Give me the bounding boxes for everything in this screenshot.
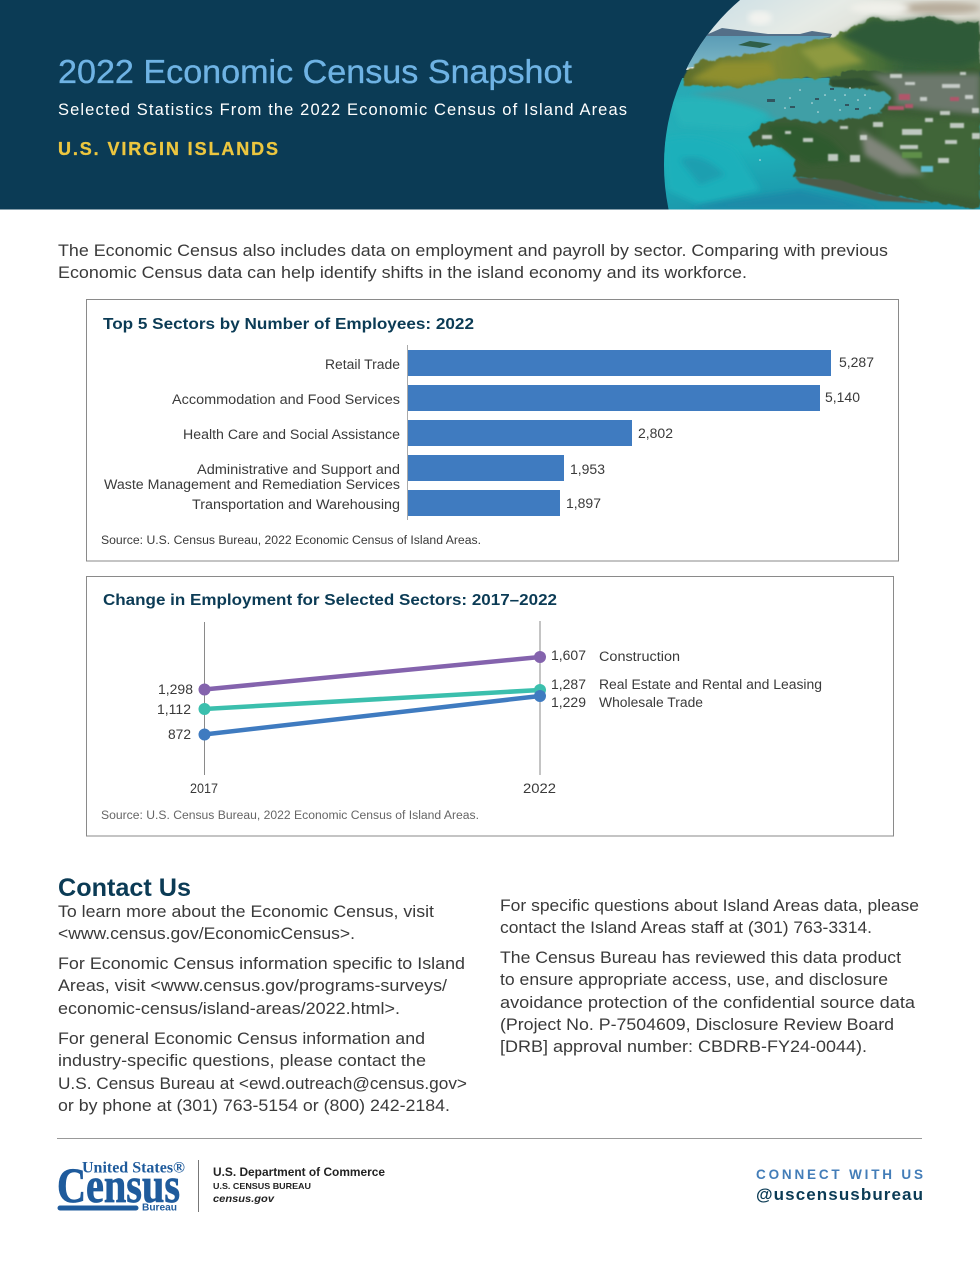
chart heading: Change in Employment for Selected Sectors: 2017–2022 xyxy=(103,592,557,609)
series: real estate xyxy=(198,684,546,715)
sector labels: Accommodation and Food Services xyxy=(172,392,400,407)
town and east shore xyxy=(748,68,980,209)
source note: Source: U.S. Census Bureau, 2022 Economic Census of Island Areas. xyxy=(101,535,481,547)
bar values: 1,897 xyxy=(566,496,601,511)
contact text: right column xyxy=(500,897,919,1056)
logo: census bureau: United States® xyxy=(82,1160,185,1176)
contact text: left column: Areas, visit <www.census.gov/programs-surveys/ xyxy=(58,977,447,995)
contact text: right column: avoidance protection of the confidential source data xyxy=(500,994,916,1012)
2017 values: 1,112 xyxy=(157,702,191,717)
logo: census bureau: census.gov xyxy=(213,1193,275,1205)
logo: census bureau: Census xyxy=(57,1157,180,1213)
title: 2022 Economic Census Snapshot xyxy=(58,53,572,90)
2022 values and sector names xyxy=(551,648,822,710)
sector labels: Health Care and Social Assistance xyxy=(183,427,400,442)
bar values: 5,287 xyxy=(839,355,874,370)
contact text: left column: economic-census/island-areas/2022.html>. xyxy=(58,1000,400,1018)
series: construction xyxy=(198,651,546,696)
2022 values and sector names: 1,607 xyxy=(551,648,586,663)
sector labels: Administrative and Support and xyxy=(197,462,400,477)
sector labels: Retail Trade xyxy=(325,357,400,372)
year labels: 2017 xyxy=(190,781,218,796)
2022 values and sector names: 1,287 xyxy=(551,677,586,692)
boats xyxy=(759,87,871,161)
logo: census bureau: U.S. CENSUS BUREAU xyxy=(213,1181,311,1191)
2022 values and sector names: 1,229 xyxy=(551,695,586,710)
intro text: Economic Census data can help identify shifts in the island economy and its workforce. xyxy=(58,264,747,282)
contact text: right column: to ensure appropriate access, use, and disclosure xyxy=(500,971,888,989)
contact text: left column: <www.census.gov/EconomicCensus>. xyxy=(58,925,355,943)
logo: census bureau: Bureau xyxy=(142,1202,177,1214)
logo: census bureau xyxy=(57,1157,385,1214)
bar values xyxy=(566,355,874,511)
bar values: 2,802 xyxy=(638,426,673,441)
contact text: left column xyxy=(58,903,467,1115)
photo: aerial view of island bay xyxy=(660,0,980,213)
2022 values and sector names: Real Estate and Rental and Leasing xyxy=(599,677,822,692)
sector labels: Waste Management and Remediation Services xyxy=(104,477,400,492)
panel: top 5 sectors bar chart xyxy=(86,300,898,561)
contact text: left column: For general Economic Census information and xyxy=(58,1030,425,1048)
social call to action xyxy=(756,1167,923,1204)
contact text: right column: For specific questions about Island Areas data, please xyxy=(500,897,919,915)
source note: Source: U.S. Census Bureau, 2022 Economic Census of Island Areas. xyxy=(101,810,479,822)
bars xyxy=(408,350,831,516)
2022 values and sector names: Construction xyxy=(599,649,680,664)
region label: U.S. VIRGIN ISLANDS xyxy=(58,139,278,159)
contact text: left column: U.S. Census Bureau at <ewd.outreach@census.gov> xyxy=(58,1075,467,1093)
chart heading: Top 5 Sectors by Number of Employees: 2022 xyxy=(103,316,474,333)
contact text: right column: [DRB] approval number: CBDRB-FY24-0044). xyxy=(500,1038,867,1056)
contact text: left column: industry-specific questions, please contact the xyxy=(58,1052,426,1070)
2017 values: 872 xyxy=(168,727,191,742)
contact text: right column: contact the Island Areas staff at (301) 763-3314. xyxy=(500,919,872,937)
subtitle: Selected Statistics From the 2022 Economic Census of Island Areas xyxy=(58,101,627,119)
contact text: left column: To learn more about the Economic Census, visit xyxy=(58,903,434,921)
bar values: 1,953 xyxy=(570,462,605,477)
header banner xyxy=(0,0,980,213)
hillside xyxy=(683,17,980,87)
sector labels xyxy=(104,357,400,512)
2017 values: 1,298 xyxy=(158,682,193,697)
contact heading: Contact Us xyxy=(58,874,191,902)
contact text: right column: The Census Bureau has reviewed this data product xyxy=(500,949,901,967)
2017 values xyxy=(157,682,193,742)
year labels xyxy=(190,781,556,796)
contact text: left column: or by phone at (301) 763-5154 or (800) 242-2184. xyxy=(58,1097,450,1115)
2022 values and sector names: Wholesale Trade xyxy=(599,695,703,710)
contact text: right column: (Project No. P-7504609, Disclosure Review Board xyxy=(500,1016,894,1034)
intro text: The Economic Census also includes data on employment and payroll by sector. Comparing with previous xyxy=(58,242,888,260)
year labels: 2022 xyxy=(523,781,556,796)
sector labels: Transportation and Warehousing xyxy=(192,497,400,512)
logo: census bureau: U.S. Department of Commerce xyxy=(213,1167,385,1179)
bar values: 5,140 xyxy=(825,390,860,405)
panel: change in employment slope chart xyxy=(86,576,894,836)
contact text: left column: For Economic Census information specific to Island xyxy=(58,955,465,973)
series: wholesale trade xyxy=(198,690,546,740)
intro text xyxy=(58,242,888,282)
social call to action: CONNECT WITH US xyxy=(756,1167,923,1182)
social call to action: @uscensusbureau xyxy=(756,1185,923,1204)
